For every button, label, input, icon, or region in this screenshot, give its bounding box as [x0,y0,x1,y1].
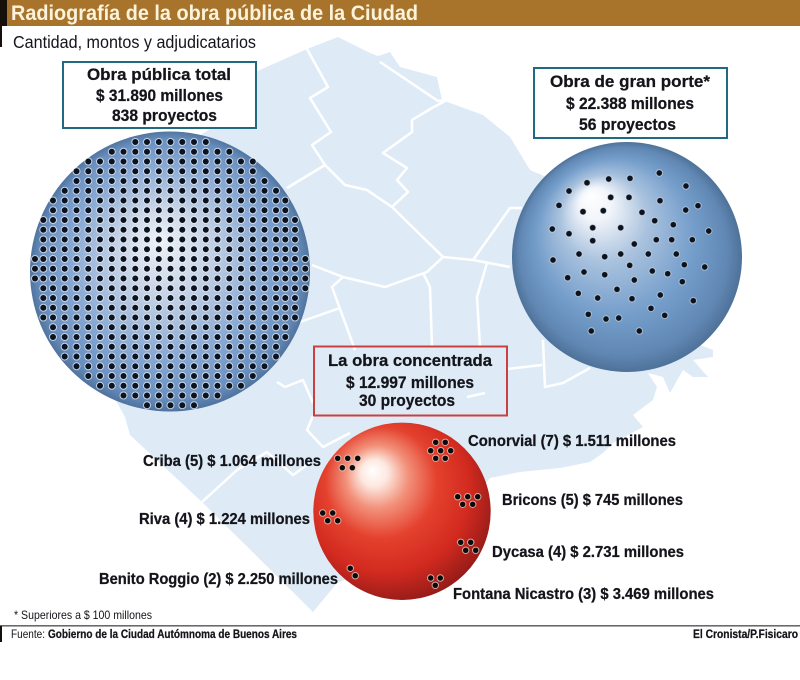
chart: big circle, 838 projects [30,132,310,412]
header bar [0,0,800,47]
chart: right circle, 56 projects [512,142,742,372]
footnote: * Superiores a $ 100 millones [14,608,152,622]
panel: la obra concentrada label: 30 proyectos [359,392,455,410]
panel: obra de gran porte label: 56 proyectos [579,116,676,134]
panel: obra de gran porte label: Obra de gran porte* [550,72,710,91]
panel: obra pública total label: Obra pública total [87,65,231,84]
background map of the city [60,37,713,612]
chart: red circle, 30 projects by contractor [313,423,491,600]
subtitle: Cantidad, montos y adjudicatarios [13,32,256,52]
label: Dycasa: Dycasa (4) $ 2.731 millones [492,544,684,561]
source: Gobierno de la Ciudad Autómnoma de Buenos Aires [48,627,297,641]
title: Radiografía de la obra pública de la Ciudad [11,2,418,25]
label: Criba: Criba (5) $ 1.064 millones [143,453,321,470]
label: Benito Roggio: Benito Roggio (2) $ 2.250 millones [99,571,338,588]
panel: la obra concentrada label [314,346,507,416]
label: Bricons: Bricons (5) $ 745 millones [502,492,683,509]
panel: obra pública total label: $ 31.890 millones [96,87,223,105]
label: Riva: Riva (4) $ 1.224 millones [139,511,310,528]
panel: la obra concentrada label: La obra concentrada [328,351,493,370]
panel: la obra concentrada label: $ 12.997 millones [346,374,474,392]
footer rule [0,625,800,642]
label: Conorvial: Conorvial (7) $ 1.511 millones [468,433,676,450]
panel: obra de gran porte label: $ 22.388 millones [566,95,694,113]
panel: obra pública total label: 838 proyectos [112,107,217,125]
panel: obra pública total label [63,62,256,128]
label: Fontana Nicastro: Fontana Nicastro (3) $ 3.469 millones [453,586,714,603]
panel: obra de gran porte label [534,68,727,138]
source: Fuente: [11,627,45,641]
